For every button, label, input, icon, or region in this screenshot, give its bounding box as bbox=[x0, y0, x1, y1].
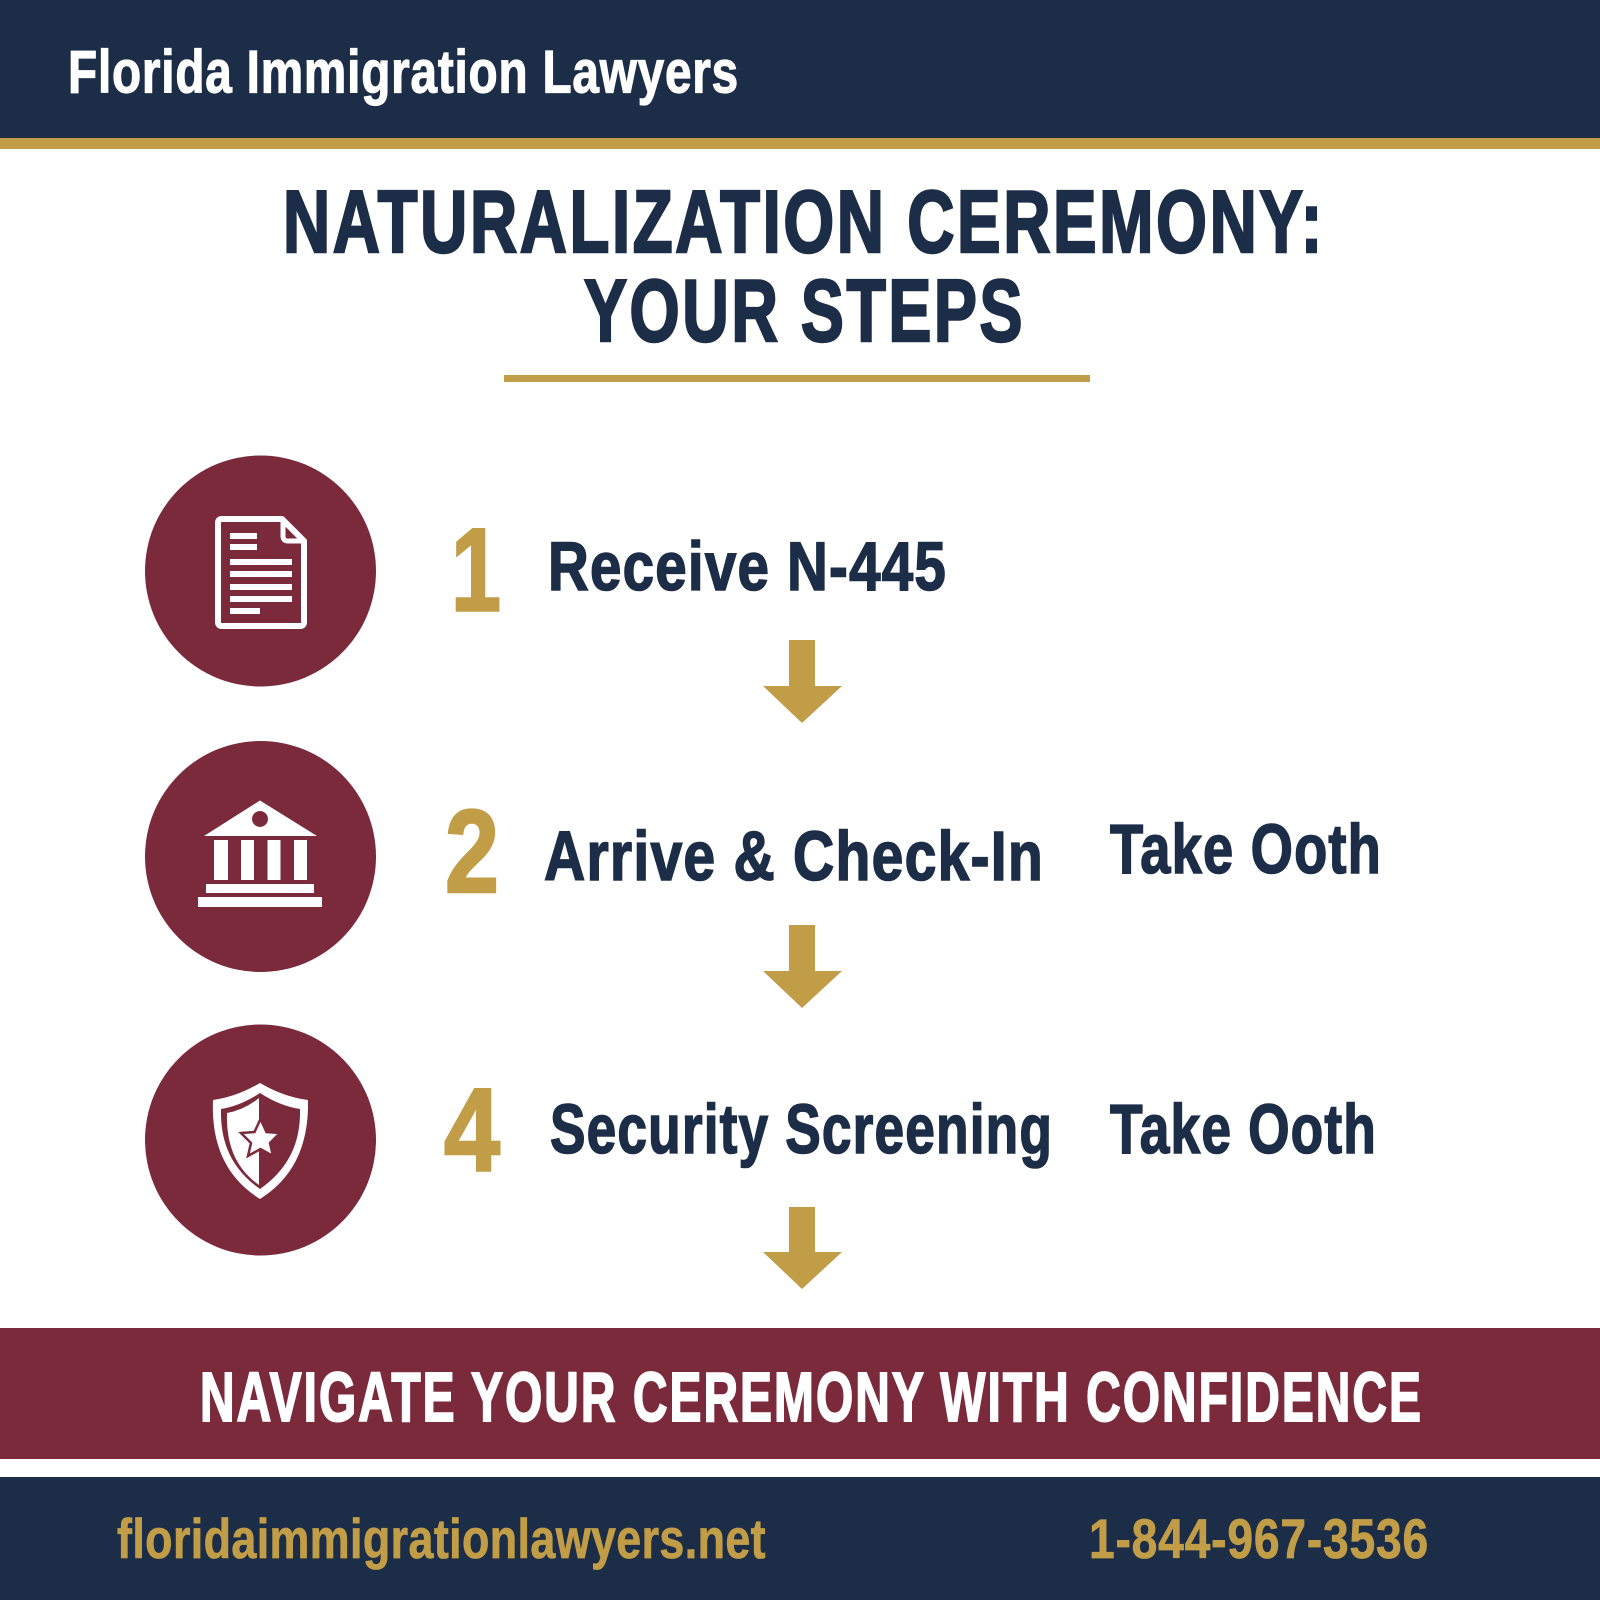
step label: Security Screening: Security Screening bbox=[550, 1090, 1053, 1168]
step label: Arrive & Check-In: Arrive & Check-In bbox=[544, 817, 1044, 895]
step 3 row bbox=[145, 1024, 1377, 1256]
title underline bbox=[504, 375, 1090, 382]
header brand name: Florida Immigration Lawyers bbox=[68, 38, 739, 106]
step number 1: 1 bbox=[451, 504, 501, 636]
icon: document bbox=[145, 456, 376, 686]
title bbox=[283, 172, 1325, 360]
step label: Take Ooth: Take Ooth bbox=[1110, 810, 1382, 888]
title: YOUR STEPS bbox=[584, 261, 1025, 360]
arrow 3 bbox=[763, 1207, 842, 1289]
step number 2: 2 bbox=[445, 786, 499, 918]
call to action banner bbox=[0, 1328, 1600, 1459]
website: floridaimmigrationlawyers.net bbox=[117, 1507, 766, 1570]
header band bbox=[0, 0, 1600, 149]
icon: shield bbox=[145, 1024, 376, 1256]
icon: courthouse bbox=[145, 741, 376, 972]
step 2 row bbox=[145, 741, 1382, 972]
footer band bbox=[0, 1477, 1600, 1600]
step label: Take Ooth: Take Ooth bbox=[1110, 1090, 1377, 1168]
phone number: 1-844-967-3536 bbox=[1089, 1507, 1429, 1570]
arrow 1 bbox=[763, 640, 842, 723]
step number 4: 4 bbox=[444, 1064, 500, 1196]
arrow 2 bbox=[763, 925, 842, 1008]
step label: Receive N-445: Receive N-445 bbox=[548, 528, 947, 605]
step 1 row bbox=[145, 456, 947, 686]
